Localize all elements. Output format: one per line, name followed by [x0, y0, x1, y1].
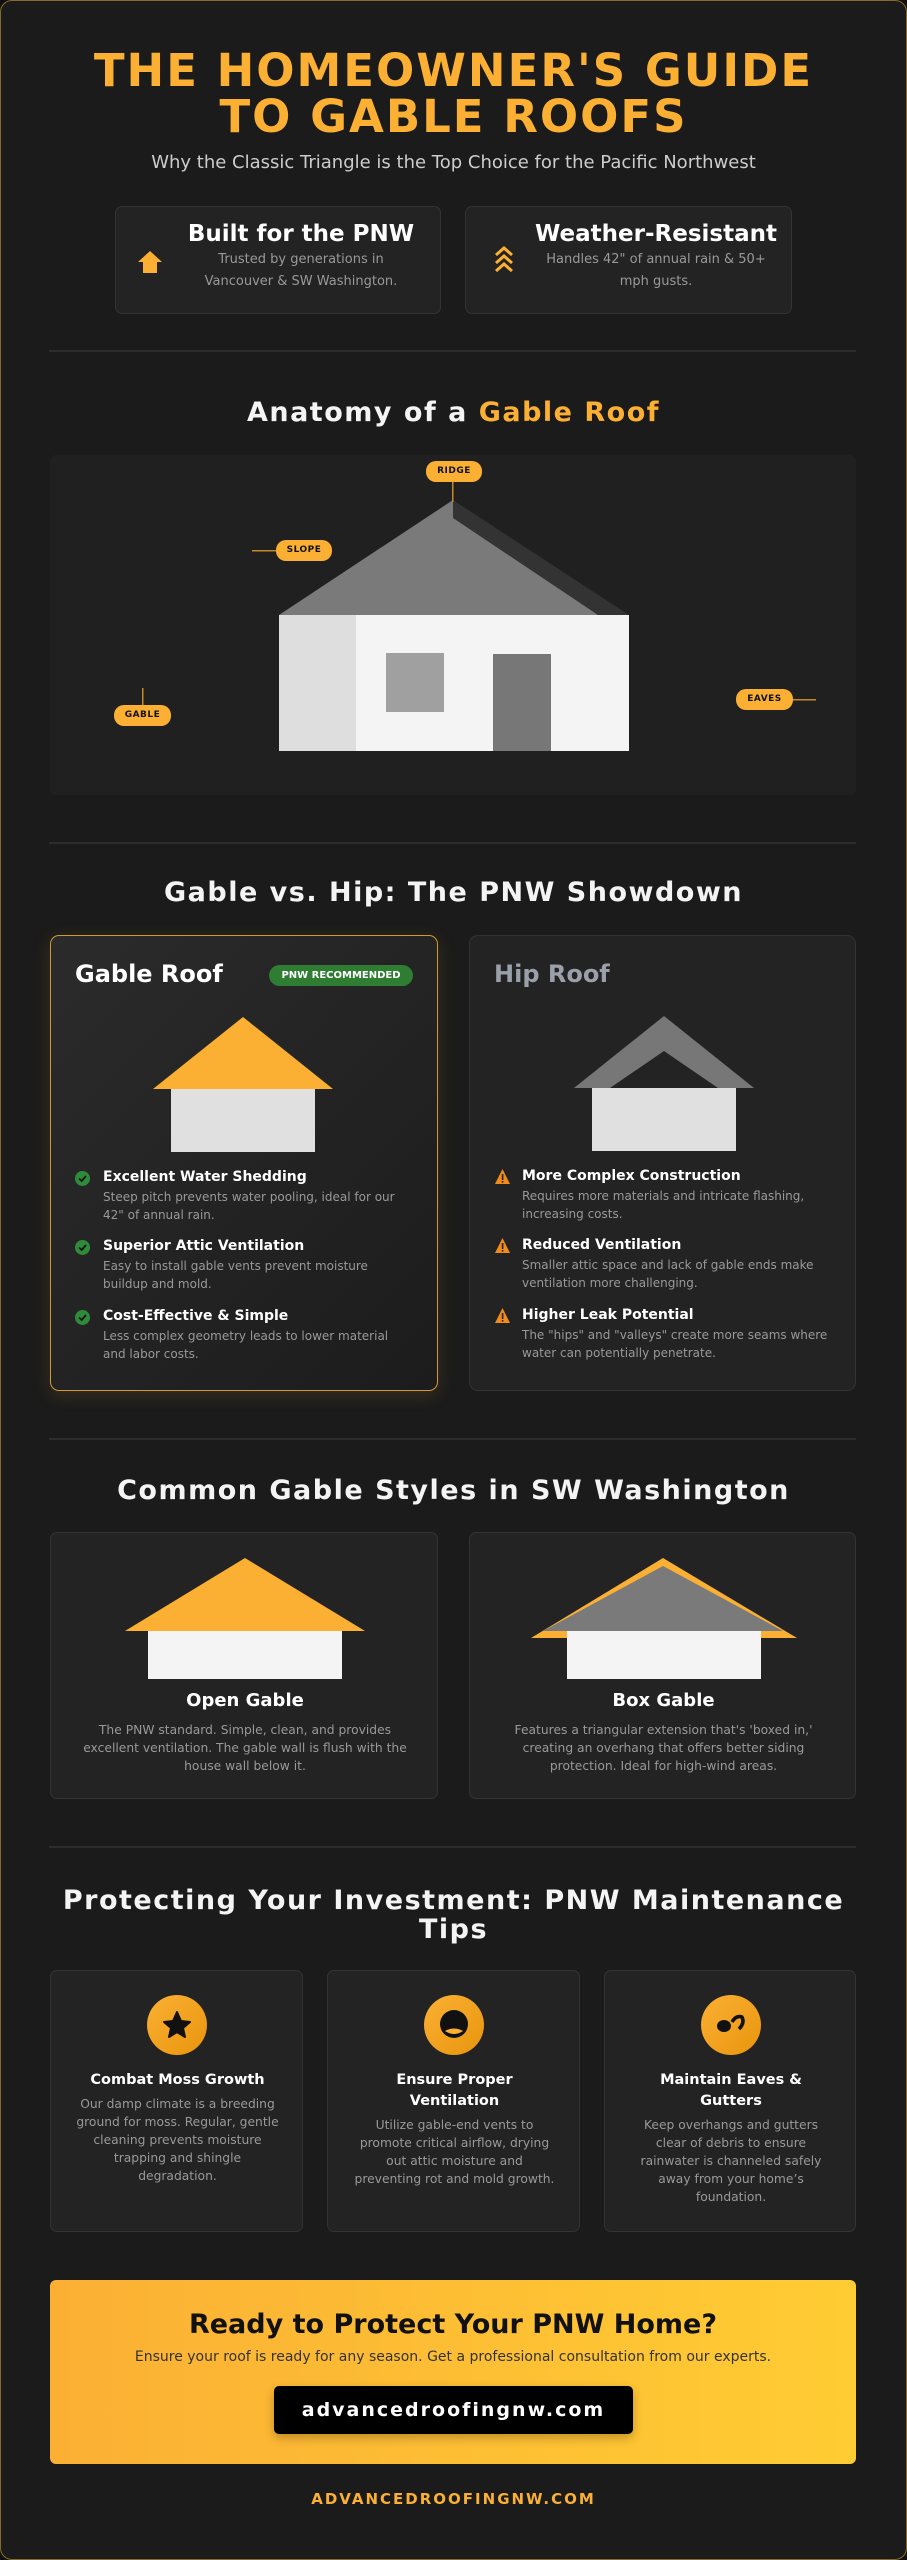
label: slope: SLOPE [287, 545, 321, 555]
description [83, 1723, 407, 1773]
con item [495, 1168, 804, 1221]
con item: More Complex Construction [522, 1168, 741, 1184]
heading: maintenance tips: Tips [419, 1914, 488, 1945]
heading: gable styles: Common Gable Styles in SW Washington [117, 1475, 790, 1506]
description: clear of debris to ensure [656, 2136, 806, 2150]
description: protection. Ideal for high-wind areas. [550, 1759, 777, 1773]
description: rainwater is channeled safely [641, 2154, 821, 2168]
text: Built for the PNW: Built for the PNW [188, 221, 414, 247]
panel: anatomy diagram [50, 455, 856, 795]
call to action [50, 2280, 856, 2464]
title: TO GABLE ROOFS [219, 90, 688, 143]
footer: ADVANCEDROOFINGNW.COM [311, 2490, 596, 2508]
text: Weather-Resistant [535, 221, 777, 289]
con item: Higher Leak Potential [522, 1307, 694, 1323]
pro item: buildup and mold. [103, 1277, 212, 1291]
panel: open gable [50, 1532, 438, 1799]
pro item: Excellent Water Shedding [103, 1169, 307, 1185]
description: degradation. [138, 2169, 217, 2183]
description: preventing rot and mold growth. [355, 2172, 554, 2186]
con item: Smaller attic space and lack of gable ends make [522, 1258, 814, 1272]
description: out attic moisture and [386, 2154, 523, 2168]
description: ground for moss. Regular, gentle [76, 2115, 279, 2129]
heading: Gable vs Hip: Gable vs. Hip: The PNW Showdown [164, 877, 743, 908]
title: Gutters [700, 2093, 762, 2109]
pro item: Less complex geometry leads to lower material [103, 1329, 388, 1343]
list: cons [495, 1168, 827, 1360]
con item: increasing costs. [522, 1207, 623, 1221]
label: ridge: RIDGE [437, 466, 471, 476]
heading: Anatomy: Anatomy of a Gable Roof [247, 397, 660, 428]
description: The PNW standard. Simple, clean, and provides [99, 1723, 391, 1737]
icon: house arrow [138, 251, 162, 273]
card title: Hip Roof [494, 960, 610, 988]
text: Built for the PNW: Trusted by generations in [218, 252, 384, 267]
text: Weather-Resistant: Weather-Resistant [535, 221, 777, 247]
card title: Gable Roof [75, 960, 223, 988]
label: gable: GABLE [125, 710, 160, 720]
list: pros [75, 1169, 395, 1361]
icon: gutters [701, 1995, 761, 2055]
title: Maintain Eaves & [660, 2072, 802, 2088]
text: Weather-Resistant: mph gusts. [620, 274, 692, 289]
description: foundation. [696, 2190, 766, 2204]
title: THE HOMEOWNER'S GUIDE [94, 44, 813, 97]
title: Ensure Proper [396, 2072, 513, 2088]
con item [495, 1237, 814, 1290]
description: excellent ventilation. The gable wall is flush with the [83, 1741, 407, 1755]
panel: tip ventilation [327, 1970, 580, 2232]
con item: water can potentially penetrate. [522, 1346, 716, 1360]
text: Built for the PNW [188, 221, 414, 289]
pro item: and labor costs. [103, 1347, 199, 1361]
label: eaves: EAVES [747, 694, 782, 704]
cta title: Ready to Protect Your PNW Home? [189, 2309, 717, 2340]
cta button: advancedroofingnw.com [302, 2399, 605, 2421]
icon: gable house [153, 1017, 333, 1152]
pro item [75, 1308, 388, 1361]
description: promote critical airflow, drying [360, 2136, 549, 2150]
heading: maintenance tips [63, 1885, 844, 1945]
description: cleaning prevents moisture [93, 2133, 262, 2147]
text: Weather-Resistant: Handles 42" of annual rain & 50+ [546, 252, 766, 267]
title: Ventilation [410, 2093, 499, 2109]
badge [269, 965, 413, 986]
description: house wall below it. [184, 1759, 306, 1773]
panel: tip gutters [604, 1970, 856, 2232]
icon: ventilation [424, 1995, 484, 2055]
badge: PNW RECOMMENDED [281, 970, 401, 981]
con item: Reduced Ventilation [522, 1237, 681, 1253]
icon: open gable house [125, 1558, 365, 1679]
cta button [274, 2386, 633, 2434]
description: Utilize gable-end vents to [376, 2118, 533, 2132]
pro item: Easy to install gable vents prevent moisture [103, 1259, 368, 1273]
label: ridge [426, 461, 482, 482]
subtitle: Why the Classic Triangle is the Top Choice for the Pacific Northwest [151, 152, 756, 173]
icon: chevrons [495, 246, 513, 272]
pro item [75, 1238, 368, 1291]
title: Combat Moss Growth [90, 2072, 265, 2088]
con item [495, 1307, 827, 1360]
icon: hip house [574, 1016, 754, 1151]
heading: maintenance tips: Protecting Your Investment: PNW Maintenance [63, 1885, 844, 1916]
description: Our damp climate is a breeding [80, 2097, 275, 2111]
con item: Requires more materials and intricate flashing, [522, 1189, 804, 1203]
label: gable [114, 705, 171, 726]
pro item: Steep pitch prevents water pooling, ideal for our [103, 1190, 395, 1204]
pro item [75, 1169, 395, 1222]
panel: tip moss [50, 1970, 303, 2232]
con item: The "hips" and "valleys" create more seams where [522, 1328, 827, 1342]
title: Open Gable [186, 1690, 304, 1711]
house illustration [142, 482, 816, 751]
label: slope [276, 540, 332, 561]
label: eaves [736, 689, 793, 710]
title [94, 44, 813, 143]
panel: hip roof card [469, 935, 856, 1391]
title [660, 2072, 802, 2109]
panel: gable roof card [50, 935, 438, 1391]
title [396, 2072, 513, 2109]
description: away from your home’s [658, 2172, 804, 2186]
description: Keep overhangs and gutters [644, 2118, 818, 2132]
description [355, 2118, 554, 2186]
description [76, 2097, 279, 2183]
cta subtitle: Ensure your roof is ready for any season. Get a professional consultation from our experts. [135, 2349, 771, 2365]
title: Box Gable [612, 1690, 715, 1711]
description: creating an overhang that offers better siding [523, 1741, 804, 1755]
feature card: Weather-Resistant [465, 206, 792, 314]
con item: ventilation more challenging. [522, 1276, 698, 1290]
description: Features a triangular extension that's 'boxed in,' [515, 1723, 812, 1737]
description: trapping and shingle [114, 2151, 241, 2165]
panel: box gable [469, 1532, 856, 1799]
icon: box gable house [531, 1558, 797, 1679]
text: Built for the PNW: Vancouver & SW Washington. [205, 274, 397, 289]
description [515, 1723, 812, 1773]
pro item: Cost-Effective & Simple [103, 1308, 288, 1324]
pro item: Superior Attic Ventilation [103, 1238, 304, 1254]
icon: moss [147, 1995, 207, 2055]
feature card: Built for the PNW [115, 206, 441, 314]
pro item: 42" of annual rain. [103, 1208, 215, 1222]
description [641, 2118, 821, 2204]
